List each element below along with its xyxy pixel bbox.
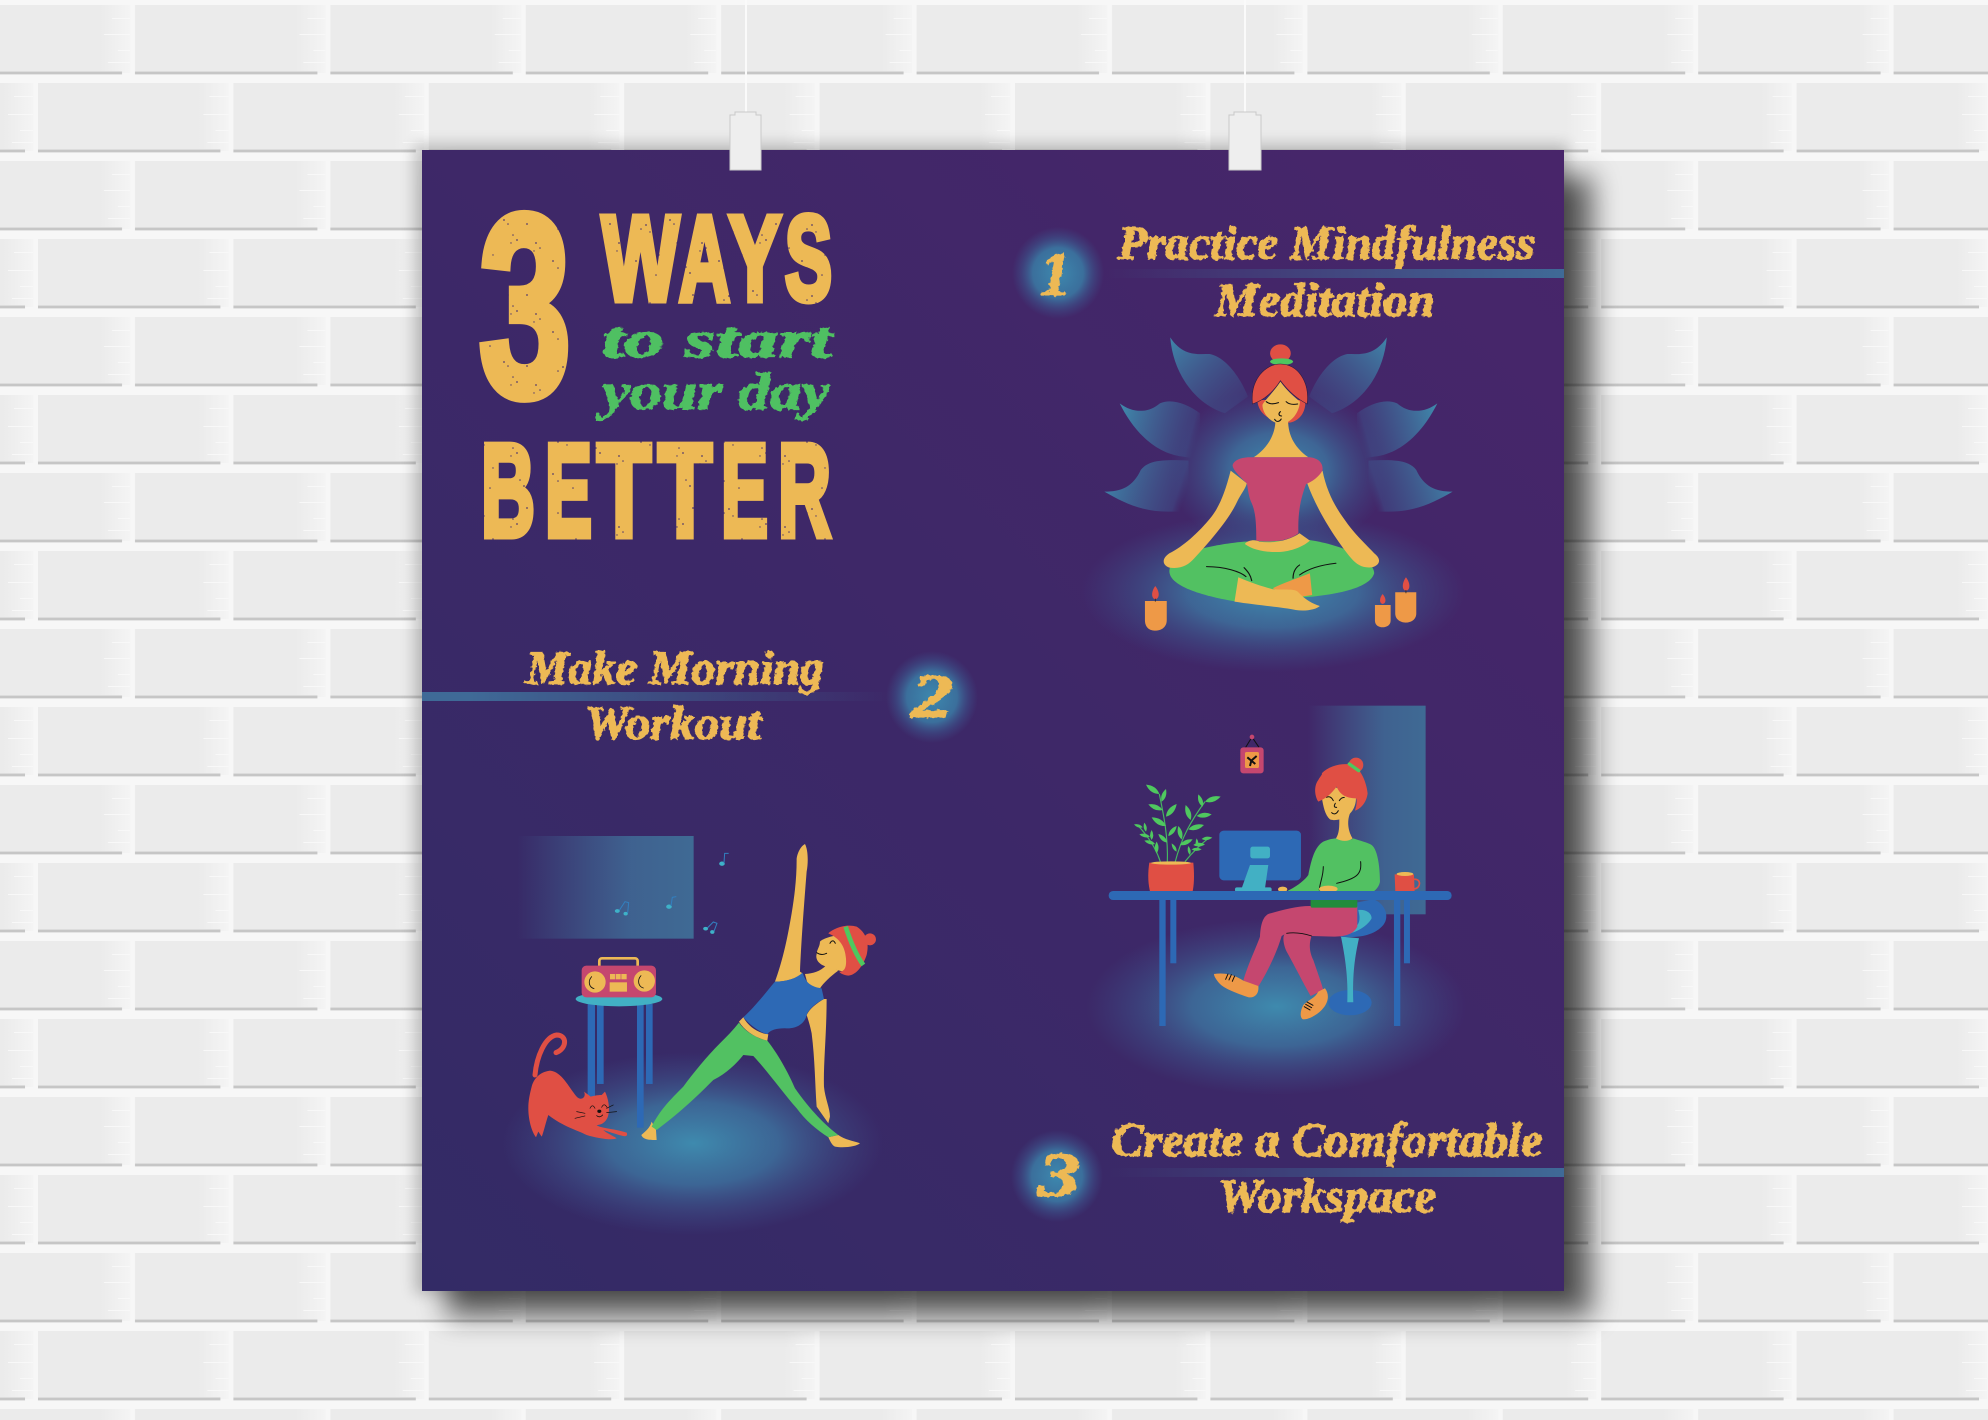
title word BETTER: B: [481, 417, 535, 564]
feet: [641, 1122, 860, 1147]
monitor: [1219, 831, 1301, 892]
clip: right: [1229, 112, 1261, 170]
heading 1: Practice Mindfulness Meditation: [1012, 217, 1564, 327]
heading text line 2: Workspace: [1218, 1170, 1436, 1223]
number badge 3: [1011, 1130, 1103, 1222]
candle: right large: [1395, 577, 1416, 623]
neck: [805, 965, 838, 988]
pink shirt: [1233, 457, 1323, 542]
heading text line 1: Create a Comfortable: [1111, 1114, 1543, 1167]
title word BETTER: T: [597, 417, 651, 564]
cat: [528, 1035, 627, 1139]
music notes: [615, 853, 729, 933]
green leggings: [652, 1023, 838, 1137]
window light: [1308, 706, 1426, 914]
title block: [479, 161, 834, 564]
plant: [1134, 783, 1221, 863]
number badge 1: 1: [1040, 241, 1071, 309]
number badge 1: [1012, 227, 1104, 319]
illustration: workspace: [1087, 706, 1467, 1095]
number badge 3: 3: [1037, 1142, 1080, 1210]
wall picture: [1240, 735, 1264, 773]
side table: [576, 992, 662, 1128]
candle: left: [1145, 586, 1167, 631]
raised arm: [775, 844, 808, 982]
left arm: [1164, 471, 1247, 568]
number badge 2: 2: [910, 663, 953, 731]
title word BETTER: E: [545, 417, 592, 564]
supporting arm: [807, 999, 830, 1123]
heading 2: Make Morning Workout: [422, 642, 978, 750]
heading text line 1: Practice Mindfulness: [1117, 217, 1535, 270]
clip: left: [730, 112, 761, 170]
face: [816, 935, 848, 973]
title word WAYS: W: [602, 190, 680, 326]
title word WAYS: Y: [729, 190, 781, 326]
hanging strings: [746, 0, 1245, 114]
desk: [1109, 891, 1452, 1026]
body glow: [1081, 387, 1464, 672]
face: [1262, 382, 1300, 424]
poster shadow: [414, 144, 1592, 1316]
subtitle: your day: your day: [595, 364, 831, 421]
flower pot: [1148, 861, 1194, 891]
title word WAYS: S: [785, 190, 832, 326]
window light: [517, 836, 694, 939]
face: [1322, 787, 1356, 820]
number badge 2: [886, 651, 978, 743]
title word BETTER: T: [658, 417, 712, 564]
lower calf: [1273, 573, 1312, 597]
poster panel: [422, 150, 1564, 1291]
heading text line 2: Workout: [585, 697, 763, 750]
waist: [1245, 533, 1310, 552]
crossed foot: [1234, 577, 1320, 611]
heading text line 2: Meditation: [1214, 274, 1435, 327]
floor glow: [503, 1052, 883, 1235]
green sweater: [1278, 838, 1380, 892]
hair front: [1252, 364, 1308, 404]
candle: right small: [1375, 594, 1391, 627]
heading rule 3: [1108, 1168, 1564, 1177]
knee creases: [1207, 563, 1336, 581]
hair bun: [1270, 344, 1293, 365]
title word BETTER: E: [721, 417, 768, 564]
lotus petals: [1104, 337, 1453, 512]
heading rule 2: [422, 692, 890, 701]
blue top: [743, 973, 824, 1034]
pink trousers: [1243, 906, 1357, 996]
facial features: [1266, 402, 1298, 421]
title word WAYS: A: [679, 190, 730, 326]
green pants: [1169, 540, 1374, 602]
heading rule 1: [1108, 269, 1564, 278]
neck: [1254, 420, 1308, 457]
facial features: [1327, 797, 1344, 814]
subtitle: to start: to start: [602, 312, 834, 369]
hair back: [1257, 400, 1305, 423]
title numeral 3: 3: [479, 161, 571, 450]
green waistband: [1311, 898, 1357, 908]
illustration: morning workout: [503, 836, 883, 1235]
coffee cup: [1395, 872, 1419, 891]
waist: [739, 1017, 768, 1041]
shoes: [1214, 974, 1328, 1019]
hair: [1315, 758, 1368, 811]
heading text line 1: Make Morning: [525, 642, 824, 695]
hair and headband: [817, 926, 876, 976]
title word BETTER: R: [778, 417, 831, 564]
illustration: meditating woman: [1081, 337, 1464, 672]
neck: [1336, 813, 1353, 841]
boombox: [582, 958, 656, 997]
stool: [1328, 899, 1386, 1015]
heading 3: Create a Comfortable Workspace: [1011, 1114, 1564, 1223]
right arm: [1307, 471, 1379, 567]
floor glow: [1087, 918, 1467, 1095]
